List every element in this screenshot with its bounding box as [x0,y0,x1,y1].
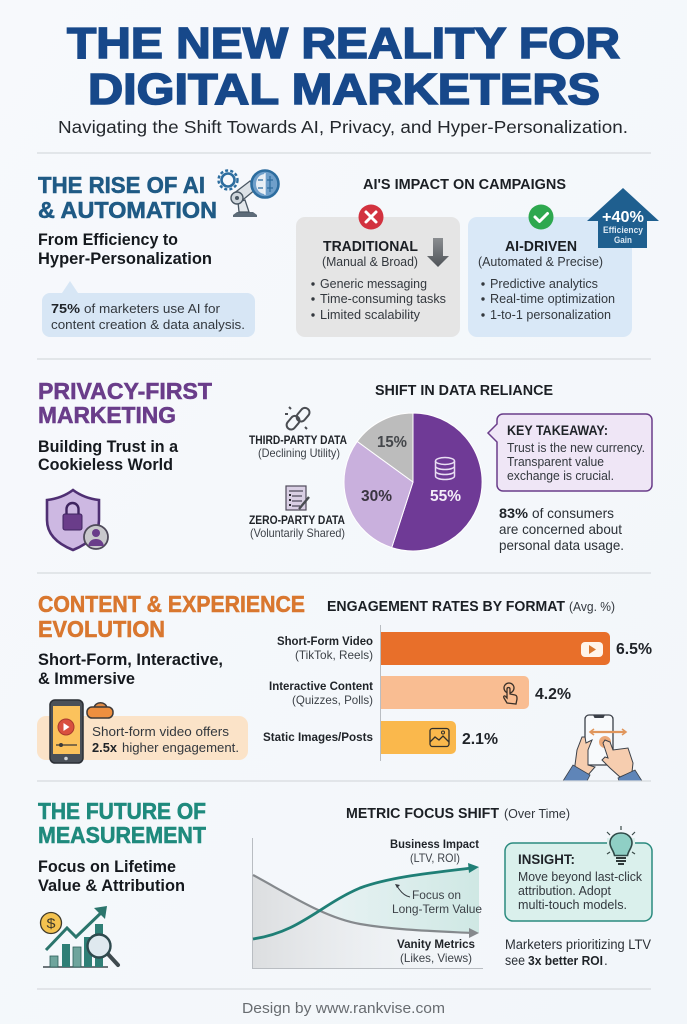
icon: broken link [285,406,311,431]
bar: short-form video: Short-Form Video [277,636,373,648]
card: traditional: Time-consuming tasks [320,291,446,306]
icon: phone with play button [50,700,83,763]
callout: insight: attribution. Adopt [518,883,611,898]
panel: future of measurement [38,798,652,968]
icon: growth chart with coin and magnifier: $ [46,915,56,931]
heading: future of measurement [38,798,206,848]
heading: content and experience: EVOLUTION [38,616,165,642]
stat: 83 percent of consumers [499,505,624,553]
callout: insight: multi-touch models. [518,897,627,912]
subheading: & Immersive [38,670,135,688]
card: AI-driven: AI-DRIVEN [505,238,577,255]
stat: marketers prioritizing LTV [505,937,651,968]
stat: marketers prioritizing LTV: Marketers prioritizing LTV [505,937,651,952]
bar: static images: 2.1% [462,731,498,748]
line: vanity metrics [253,875,479,938]
callout: key takeaway: KEY TAKEAWAY: [507,423,608,438]
heading: privacy-first [38,378,212,428]
subheading [38,231,212,268]
callout: 75 percent [42,281,255,337]
footer: Design by www.rankvise.com [242,1000,445,1017]
heading: the rise of AI: THE RISE OF AI [38,172,205,198]
pie chart: 55% [430,488,461,505]
pie chart: 15% [377,434,407,451]
subheading: Hyper-Personalization [38,250,212,268]
panel: rise of AI and automation [38,170,659,337]
icon: hands swiping phone [563,715,642,781]
bar: interactive content: (Quizzes, Polls) [292,693,373,707]
annotation: focus on long-term value: Long-Term Value [392,902,482,916]
card: traditional: (Manual & Broad) [322,254,418,269]
card: AI-driven: Real-time optimization [490,291,615,306]
label: zero-party data: ZERO-PARTY DATA [249,515,345,527]
heading: the rise of AI: & AUTOMATION [38,197,217,223]
title: THE NEW REALITY FOR [67,19,620,68]
heading: content and experience: CONTENT & EXPERIENCE [38,591,305,617]
icon: down arrow [427,238,449,267]
bar: short-form video: (TikTok, Reels) [295,648,373,662]
pie chart: 30% [361,488,392,505]
callout: insight: INSIGHT: [518,852,575,867]
line: business impact [253,863,479,939]
heading: the rise of AI [38,172,217,223]
callout: key takeaway: exchange is crucial. [507,468,614,483]
callout: short-form video [37,716,248,760]
subheading [38,858,185,895]
card: traditional: Generic messaging [320,276,427,291]
label: third-party data: THIRD-PARTY DATA [249,435,347,447]
subheading [38,651,223,688]
panel: privacy-first marketing [38,378,652,553]
line chart: Business Impact [390,839,479,851]
card: traditional [296,204,460,337]
callout: 75 percent: 75% [51,301,80,316]
title: DIGITAL MARKETERS [88,65,600,114]
card: AI-driven: (Automated & Precise) [478,254,603,269]
chart heading: shift in data reliance: SHIFT IN DATA RELIANCE [375,383,553,399]
badge: +40% efficiency gain: Gain [614,235,632,246]
stat: 83 percent of consumers: personal data usage. [499,537,624,553]
heading: content and experience [38,591,305,642]
chart heading: metric focus shift: METRIC FOCUS SHIFT [346,806,499,822]
label: zero-party data [249,486,345,540]
stat: 83 percent of consumers: 83% [499,505,529,521]
line chart: (LTV, ROI) [410,851,460,865]
label: third-party data [249,406,347,460]
badge: +40% efficiency gain: Efficiency [603,225,644,236]
icon: light bulb [607,826,635,868]
bar: interactive content: 4.2% [535,686,571,703]
chart heading: metric focus shift [346,806,570,822]
annotation: focus on long-term value: Focus on [412,888,461,902]
subheading: Value & Attribution [38,877,185,895]
bar: short-form video [277,632,652,665]
icon: survey form [286,486,309,510]
callout: insight [505,826,652,921]
bar: interactive content: Interactive Content [269,681,373,693]
subheading: Cookieless World [38,456,173,474]
chart heading: engagement rates: (Avg. %) [569,600,615,614]
subheading: Short-Form, Interactive, [38,651,223,669]
subtitle: Navigating the Shift Towards AI, Privacy, and Hyper-Personalization. [58,117,628,137]
line chart: (Likes, Views) [400,951,472,965]
card: AI-driven: 1-to-1 personalization [490,307,611,322]
heading: privacy-first: PRIVACY-FIRST [38,378,212,404]
subheading: Building Trust in a [38,438,179,456]
heading: future of measurement: MEASUREMENT [38,822,206,848]
subheading: Focus on Lifetime [38,858,176,876]
bar: interactive content [269,676,571,709]
subheading [38,438,179,474]
callout: insight: Move beyond last-click [518,869,642,884]
callout: 75 percent: content creation & data analysis. [51,317,245,332]
icon: shield with lock and user [47,490,108,550]
heading: privacy-first: MARKETING [38,402,176,428]
callout: short-form video: Short-form video offers [92,724,230,739]
icon: growth chart with coin and magnifier [40,906,118,967]
chart heading: metric focus shift: (Over Time) [504,807,570,821]
card: traditional: Limited scalability [320,307,420,322]
bar: short-form video: 6.5% [616,641,652,658]
callout: key takeaway [488,414,652,491]
badge: +40% efficiency gain: +40% [602,209,644,226]
bar: static images [263,721,498,754]
label: zero-party data: (Voluntarily Shared) [250,526,345,540]
icon: robot arm with brain [218,170,278,217]
stat: 83 percent of consumers: of consumers [532,505,614,521]
callout: key takeaway: Trust is the new currency. [507,440,645,455]
heading: future of measurement: THE FUTURE OF [38,798,206,824]
card: traditional: TRADITIONAL [323,238,418,255]
label: third-party data: (Declining Utility) [258,446,340,460]
icon: green check [528,204,554,230]
stat: marketers prioritizing LTV: see [505,953,525,968]
card: AI-driven [468,204,632,337]
card: AI-driven: Predictive analytics [490,276,598,291]
callout: key takeaway: Transparent value [507,454,604,469]
title [67,19,620,114]
panel: content and experience evolution [37,591,652,781]
icon: VR headset [87,703,113,718]
stat: 83 percent of consumers: are concerned about [499,521,622,537]
bar: static images: Static Images/Posts [263,732,373,744]
icon: red cross [358,204,384,230]
callout: 75 percent: of marketers use AI for [84,301,221,316]
chart heading: AI's impact: AI'S IMPACT ON CAMPAIGNS [363,177,566,193]
stat: marketers prioritizing LTV: . [604,953,608,968]
callout: short-form video: 2.5x [92,740,118,755]
badge: +40% efficiency gain [587,188,659,248]
line chart [252,838,483,968]
icon: database [436,458,454,480]
stat: marketers prioritizing LTV: 3x better ROI [528,953,603,968]
callout: short-form video: higher engagement. [122,740,239,755]
chart heading: engagement rates: ENGAGEMENT RATES BY FORMAT [327,599,565,615]
annotation: focus on long-term value [392,884,482,916]
subheading: From Efficiency to [38,231,178,249]
bar chart [263,625,652,761]
line chart: Vanity Metrics [397,939,475,951]
pie chart [344,413,482,551]
